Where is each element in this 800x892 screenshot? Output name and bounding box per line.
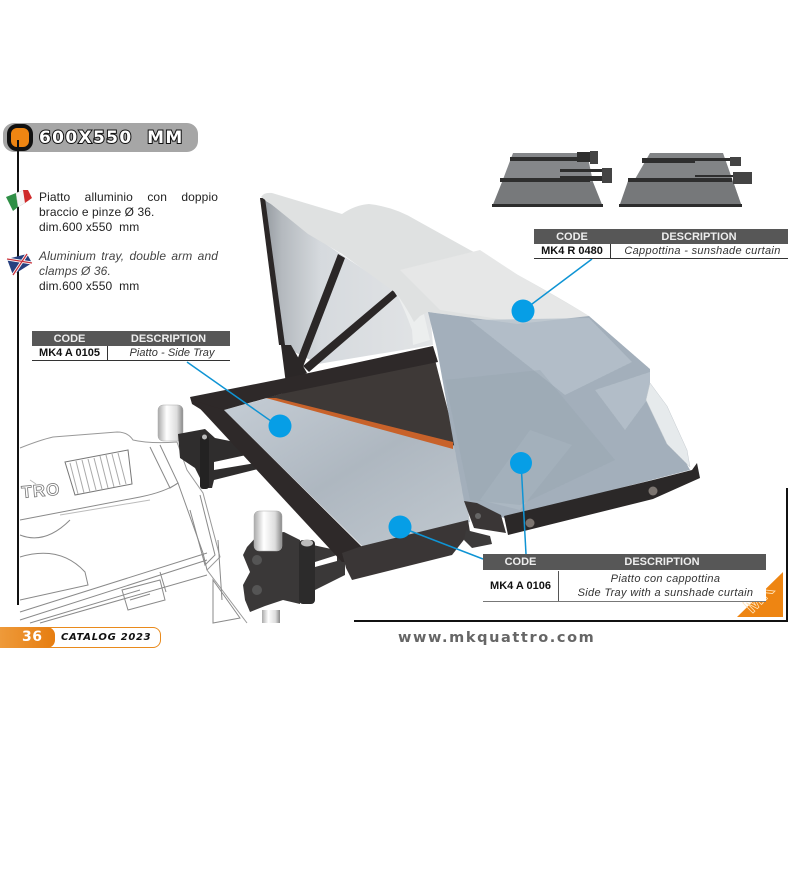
marker stem — [17, 140, 19, 152]
size heading text: 600X550 MM — [39, 128, 184, 148]
flag: Italy — [6, 190, 32, 211]
size heading pill — [3, 123, 198, 152]
website address: www.mkquattro.com — [398, 630, 595, 646]
description header — [107, 331, 230, 346]
table: side tray — [32, 331, 230, 361]
tray grey surface — [224, 398, 470, 546]
code header: CODE — [556, 231, 588, 243]
top view tray one — [492, 151, 612, 207]
description header — [558, 554, 766, 570]
white sunshade cover — [261, 193, 589, 324]
code value: MK4 A 0106 — [490, 580, 551, 592]
front sunshade mesh — [428, 312, 690, 518]
page number — [0, 627, 55, 648]
lower clamp and arms — [243, 511, 345, 623]
curtain frame struts — [260, 198, 397, 384]
corner triangle with logo: MK — [739, 578, 779, 618]
code value — [32, 346, 108, 360]
code header — [32, 331, 107, 346]
tray dark rear section — [266, 352, 458, 450]
curtain fold behind struts — [396, 293, 430, 345]
code header — [483, 554, 558, 570]
back curtain mesh panel — [261, 198, 433, 364]
orange tray edge — [266, 398, 453, 449]
code header — [534, 229, 610, 244]
catalog label: CATALOG 2023 — [61, 632, 151, 643]
description value: Cappottina - sunshade curtain — [624, 245, 781, 257]
top view tray two — [619, 153, 752, 207]
leader lines — [187, 259, 592, 559]
table: tray with curtain — [483, 554, 766, 602]
seat box logo lettering: TRO — [21, 480, 61, 502]
page frame lines — [17, 140, 788, 622]
mesh shaded fold — [445, 370, 615, 505]
table: sunshade curtain — [534, 229, 788, 259]
code value: MK4 R 0480 — [541, 245, 603, 257]
description value — [578, 573, 753, 599]
English description: Aluminium tray, double arm and — [39, 249, 218, 263]
code header: CODE — [54, 333, 85, 345]
mesh fold highlights — [470, 318, 650, 510]
description header: DESCRIPTION — [624, 556, 700, 568]
upper clamp and arms — [158, 405, 262, 489]
English description — [38, 249, 218, 293]
Italian description: Piatto alluminio con doppio — [39, 190, 218, 204]
English description: clamps Ø 36. — [39, 264, 111, 278]
curtain front rail — [464, 463, 700, 548]
clear plastic side — [646, 383, 690, 467]
description header: DESCRIPTION — [661, 231, 737, 243]
English description: dim.600 x550 mm — [39, 279, 139, 293]
Italian description: dim.600 x550 mm — [39, 220, 139, 234]
description value: Side Tray with a sunshade curtain — [578, 587, 753, 599]
Italian description: braccio e pinze Ø 36. — [39, 205, 154, 219]
icon: orange marker — [7, 124, 33, 151]
tray frame — [190, 346, 470, 580]
description header: DESCRIPTION — [131, 333, 206, 345]
code header: CODE — [505, 556, 536, 568]
code value — [534, 244, 611, 258]
description value: Piatto - Side Tray — [129, 347, 215, 359]
code value — [483, 571, 559, 601]
callout dots — [268, 300, 534, 538]
description header — [610, 229, 788, 244]
page number: 36 — [22, 629, 42, 645]
flag: UK — [7, 254, 32, 275]
description value: Piatto con cappottina — [611, 573, 720, 585]
line-art seat box — [20, 432, 247, 623]
footer page tab — [0, 627, 161, 648]
Italian description — [39, 190, 218, 234]
code value: MK4 A 0105 — [39, 347, 100, 359]
